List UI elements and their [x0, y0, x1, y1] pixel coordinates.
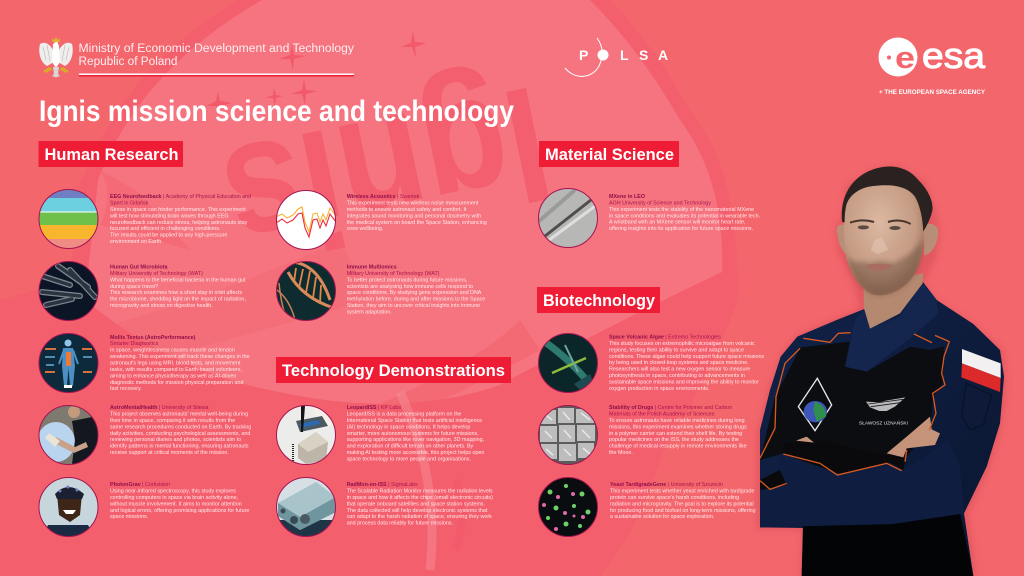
text: leopardiss: LeopardISS is a data processing platform on the [347, 411, 461, 418]
text: yeast tardigradegene: for producing food and biofuel on long-term missions, offering [610, 508, 756, 514]
stubble [847, 238, 923, 295]
text: human gut microbiota: This research examines how a short stay in orbit affects [110, 290, 242, 296]
logo: esa: e [895, 40, 915, 75]
logo: polsa: P [579, 47, 588, 63]
icon: astronaut at window [40, 406, 98, 464]
text: wireless acoustics: crew wellbeing. [347, 226, 384, 232]
text: yeast tardigradegene: protein can survive space's harsh conditions, including [610, 495, 739, 501]
text: leopardiss: space technology to more people and organisations. [347, 456, 471, 463]
text: wireless acoustics: the medical system on board the Space Station, enhancing [347, 220, 487, 226]
item: space volcanic algae [538, 333, 764, 393]
text: photongrav: PhotonGrav [110, 482, 142, 488]
icon: man with sensor cap [38, 477, 100, 537]
text: eeg neurofeedback: will test how stimulating brain waves through EEG [109, 213, 229, 219]
heading: material science: Material Science [545, 145, 674, 164]
astronaut portrait [757, 165, 1007, 576]
item: mollis textus [38, 333, 250, 393]
text: astromentalhealth: This project observes astronauts' mental well-being during [110, 411, 248, 418]
text: stability of drugs: Materials of the Polish Academy of Sciences [609, 411, 715, 418]
suit: chest panel [760, 342, 944, 460]
logo: esa [878, 35, 986, 96]
text: mxene in leo: in space conditions and evaluates its potential in wearable tech. [609, 213, 760, 219]
text: radmon-on-iss: in space and how it affects the chips (small electronic circuits) [347, 495, 493, 501]
text: immune multiomics: Station, they aim to uncover critical insights into immune [347, 303, 480, 309]
text: wireless acoustics: This experiment tests new wireless noise measurement [347, 200, 479, 207]
text: eeg neurofeedback: The results could be applied to any high-pressure [110, 233, 227, 239]
text: mollis textus: fast recovery. [110, 386, 142, 392]
suit: collar [845, 282, 938, 372]
text: radmon-on-iss: The data collected will help develop electronic systems that [347, 508, 488, 514]
text: mollis textus: Smarter Diagnostics [110, 341, 158, 347]
text: mollis textus: aiming to enhance physiotherapy as well as AI-driven [110, 373, 236, 379]
item: stability of drugs [538, 405, 747, 465]
text: radmon-on-iss: The Scalable Radiation Monitor measures the radiation levels [347, 488, 493, 495]
text: human gut microbiota: microgravity and stress on digestive health. [110, 303, 213, 309]
heading: biotechnology [537, 287, 660, 313]
text: space volcanic algae: photosynthesis in space, contributing to advancements in [609, 373, 745, 379]
text: eeg neurofeedback: environment on Earth. [110, 239, 163, 245]
text: leopardiss: making AI testing more accessible, this project helps open [347, 450, 484, 456]
text: eeg neurofeedback: | Academy of Physical Education and [162, 194, 251, 200]
text: radmon-on-iss: can adapt to the harsh radiation of space, ensuring they work [347, 514, 492, 520]
item: mxene in leo [538, 188, 760, 248]
text: stability of drugs: popular medicines on the ISS, the study addresses the [609, 437, 739, 443]
icon: dna helix [276, 261, 336, 321]
text: stability of drugs: To ensure astronauts have reliable medicines during long [609, 418, 745, 424]
hair [842, 166, 933, 232]
icon: hardware and probe [276, 405, 336, 465]
text: wireless acoustics: | Svantek [396, 194, 420, 200]
text: space volcanic algae: sustainable space missions and improving the ability to monitor [609, 379, 759, 386]
text: mollis textus: weakening. This experiment will track these changes in the [109, 354, 250, 360]
text: space volcanic algae: regions, testing their ability to survive and adapt to space [609, 347, 744, 353]
text: mxene in leo: A wristband with an MXene sensor will monitor heart rate, [609, 220, 746, 226]
text: space volcanic algae: oxygen production in space environments. [609, 386, 710, 392]
panel: human research [37, 141, 487, 537]
text: astromentalhealth: | University of Silesia [157, 405, 209, 411]
text: human gut microbiota: during space travel? [110, 284, 158, 290]
text: immune multiomics: space conditions. By studying gene expression and DNA [347, 290, 482, 296]
text: leopardiss: | KP Labs [376, 405, 401, 411]
text: immune multiomics: scientists are analysing how immune cells respond to [347, 284, 473, 290]
logo: polsa: L [620, 47, 629, 63]
item: leopardiss [276, 405, 484, 465]
text: human gut microbiota: What happens to the beneficial bacteria in the human gut [110, 277, 246, 283]
text: stability of drugs: missions, this experiment examines whether storing drugs [609, 424, 747, 430]
name badge wings: SŁAWOSZ UZNAŃSKI [859, 420, 908, 427]
heading: material science [539, 141, 679, 167]
text: space volcanic algae: Space Volcanic Algae [609, 334, 664, 341]
pocket [962, 383, 992, 430]
text: leopardiss: smarter, more autonomous systems for future missions, [347, 431, 479, 437]
text: human gut microbiota: the microbiome, shedding light on the impact of radiation, [110, 296, 246, 303]
heading: technology demonstrations: Technology Demonstrations [282, 361, 505, 380]
item: eeg neurofeedback [38, 189, 251, 249]
text: yeast tardigradegene: | University of Szczecin [666, 482, 723, 488]
neck [863, 273, 923, 329]
text: wireless acoustics: methods to ensure astronaut safety and comfort. It [347, 207, 467, 213]
item: immune multiomics [276, 261, 485, 321]
text: mollis textus: Mollis Textus (AstroPerformance) [110, 335, 196, 341]
name badge wings [859, 397, 908, 427]
text: space volcanic algae: Researchers will also test a new oxygen sensor to measure [609, 366, 750, 373]
text: photongrav: space missions. [110, 514, 149, 520]
panel: technology demonstrations [276, 357, 511, 538]
text: space volcanic algae: by being used in closed-loop systems and space medicine. [609, 360, 749, 366]
icon: sound waves [276, 190, 336, 250]
text: astromentalhealth: daily activities, conducting psychological assessments, and [110, 431, 250, 437]
text: radmon-on-iss: | SigmaLabs [387, 482, 418, 488]
text: mollis textus: astronaut's legs using MRI, blood tests, and movement [110, 360, 241, 367]
text: stability of drugs: Stability of Drugs [609, 405, 653, 411]
text: eeg neurofeedback: focused and efficient in challenging conditions. [110, 226, 221, 232]
text: mxene in leo: AGH University of Science and Technology [609, 200, 711, 207]
hands [887, 417, 940, 457]
suit: front sleeve [760, 440, 964, 527]
decorative stars [206, 31, 426, 116]
text: mxene in leo: MXene in LEO [609, 194, 646, 200]
text: immune multiomics: system adaptation. [347, 309, 392, 316]
text: wireless acoustics: integrates sound monitoring and personal dosimetry with [347, 213, 481, 219]
panel: material science [538, 141, 760, 248]
text: eeg neurofeedback: EEG Neurofeedback [110, 194, 162, 200]
icon: radiation monitor [276, 477, 336, 538]
text: eeg neurofeedback: Sport in Gdańsk [110, 200, 149, 207]
text: immune multiomics: Military University of Technology (WAT) [347, 271, 440, 277]
text: stability of drugs: in a polymer carrier can extend their shelf life. By testing [609, 431, 742, 437]
icon: body scan [38, 333, 100, 393]
heading: human research: Human Research [44, 145, 178, 164]
text: astromentalhealth: reviewing personal diaries and photos, scientists aim to [110, 437, 241, 443]
text: human gut microbiota: Human Gut Microbiota [110, 264, 168, 271]
logo: esa: + THE EUROPEAN SPACE AGENCY [879, 90, 985, 96]
icon: drug carrier grid [538, 405, 598, 465]
icon: colour bands [38, 189, 100, 249]
text: astromentalhealth: AstroMentalHealth [110, 405, 158, 411]
text: astromentalhealth: identify patterns in mental functioning, ensuring astronauts [110, 444, 249, 450]
icon: bacteria [38, 261, 100, 321]
text: stability of drugs: | Centre for Polymer and Carbon [653, 405, 732, 411]
text: radmon-on-iss: RadMon-on-ISS [347, 482, 387, 488]
text: leopardiss: International Space Station that tests artificial intelligence [347, 418, 482, 424]
title: Ignis mission science and technology [39, 95, 514, 128]
text: astromentalhealth: receive support at critical moments of the mission. [110, 450, 229, 456]
text: leopardiss: (AI) technology in space conditions. It helps develop [347, 424, 470, 430]
text: eeg neurofeedback: neurofeedback can reduce stress, helping astronauts stay [110, 220, 248, 226]
facial features [850, 220, 911, 271]
text: radmon-on-iss: and process data reliably for future missions. [347, 521, 453, 527]
text: immune multiomics: To better protect astronauts during future missions, [347, 277, 468, 283]
logo: polsa: S [639, 47, 648, 63]
text: yeast tardigradegene: This experiment tests whether yeast enriched with tardigrade [610, 488, 754, 495]
item: radmon-on-iss [276, 477, 493, 538]
icon: material fibre [538, 188, 598, 248]
item: human gut microbiota [38, 261, 246, 321]
heading: biotechnology: Biotechnology [543, 291, 656, 310]
item: photongrav [38, 477, 249, 537]
text: photongrav: and logical errors, offering promising applications for future [110, 508, 249, 514]
text: mollis textus: diagnostic methods for mission physical preparation and [110, 380, 243, 386]
orange piping [760, 333, 949, 489]
text: immune multiomics: methylation before, during and after missions to the Space [347, 296, 485, 303]
icon: algae [538, 333, 598, 393]
suit [760, 282, 1004, 576]
text: mxene in leo: This experiment tests the stability of the nanomaterial MXene [609, 207, 754, 213]
logo: polsa: A [658, 47, 668, 63]
logo: ministry of economic development and technology: Republic of Poland [78, 56, 178, 68]
text: photongrav: without muscle involvement. It aims to monitor attention [109, 501, 242, 507]
text: yeast tardigradegene: a sustainable solution for space exploration. [610, 514, 715, 520]
suit: black cuff [783, 441, 906, 474]
text: astromentalhealth: their time in space, comparing it with results from the [110, 418, 235, 424]
heading: human research [38, 141, 183, 167]
face [844, 184, 923, 295]
text: photongrav: Using near-infrared spectroscopy, this study explores [110, 488, 236, 495]
text: human gut microbiota: Military University of Technology (WAT) [110, 271, 203, 277]
item: astromentalhealth [37, 405, 251, 465]
text: immune multiomics: Immune Multiomics [347, 264, 397, 271]
text: radmon-on-iss: that operate onboard satellites and space station systems. [347, 501, 485, 507]
mission patch [798, 378, 832, 431]
text: stability of drugs: challenge of medical resupply in remote environments like [609, 444, 747, 450]
flag patch [961, 349, 1001, 392]
item: yeast tardigradegene [538, 477, 756, 537]
text: eeg neurofeedback: Stress in space can hinder performance. This experiment [110, 207, 246, 213]
logo: polsa [565, 38, 668, 76]
panel: biotechnology [537, 287, 764, 537]
text: leopardiss: supporting applications like rover navigation, 3D mapping, [347, 437, 484, 443]
icon: polish eagle [39, 38, 73, 78]
text: space volcanic algae: conditions. These algae could help support future space missions [609, 354, 764, 360]
text: space volcanic algae: This study focuses on extremophilic microalgae from volcanic [609, 341, 755, 347]
ears [837, 225, 847, 255]
text: astromentalhealth: same research procedures conducted on Earth. By tracking [110, 424, 251, 430]
decorative mission patch lettering: Ignis [210, 52, 565, 298]
text: mxene in leo: offering insights into its application for future space missions. [609, 226, 754, 232]
logo: ministry of economic development and technology [39, 38, 354, 78]
text: wireless acoustics: Wireless Acoustics [347, 194, 396, 200]
text: stability of drugs: the Moon. [609, 450, 633, 456]
text: leopardiss: LeopardISS [347, 405, 377, 411]
text: ministry name: Ministry of Economic Development and Technology [78, 43, 354, 55]
icon: fluorescent yeast cells [538, 477, 598, 537]
text: yeast tardigradegene: radiation and microgravity. The goal is to explore its potential [610, 501, 754, 507]
text: photongrav: controlling computers in space via brain activity alone, [110, 495, 239, 501]
text: mollis textus: In space, weightlessness causes muscle and tendon [110, 348, 235, 354]
text: leopardiss: and exploration of difficult terrain on other planets. By [347, 444, 473, 450]
text: mollis textus: tasks, with results compared to Earth-based volunteers, [110, 367, 242, 373]
logo: esa: esa [922, 35, 986, 76]
item: wireless acoustics [276, 190, 487, 250]
text: space volcanic algae: | Extremo Technologies [664, 334, 721, 341]
text: photongrav: | Cortivision [141, 482, 170, 488]
text: yeast tardigradegene: Yeast TardigradeGene [610, 482, 666, 488]
